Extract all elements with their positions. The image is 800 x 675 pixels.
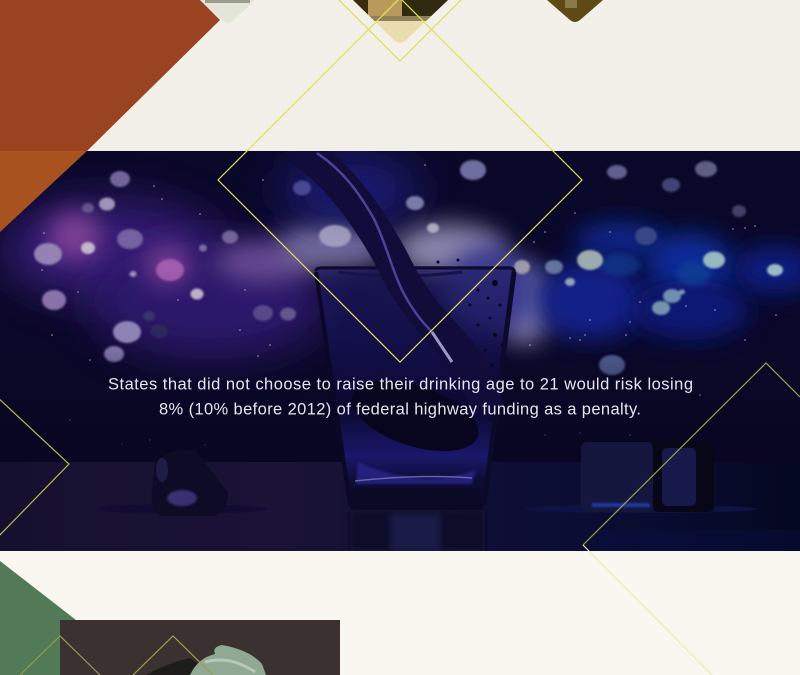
icon: sage leaves [146,645,266,675]
rust triangle [0,0,220,151]
text block: penalty statement: 8% (10% before 2012) of federal highway funding as a penalty. [159,400,641,418]
small top diamond [337,0,463,61]
panel: drinking glass photo [0,151,800,551]
photo thumbnail: gold diamond [353,0,448,42]
large centre diamond [218,0,582,362]
table surface [0,462,800,551]
text block: penalty statement: States that did not choose to raise their drinking age to 21 would risk losing [108,376,693,394]
icon: glass reflection [350,510,485,551]
lower left diamond [20,636,100,675]
photo thumbnail: white diamond [200,0,254,23]
text block: penalty statement [108,376,693,418]
icon: ice cube left [152,458,266,516]
lower middle diamond [133,636,213,675]
icon: glass of water [314,266,516,510]
right diamond on photo [583,363,800,545]
photo thumbnail: olive diamond [547,0,603,22]
panel: dark plant photo [60,620,340,675]
green triangle [0,561,76,675]
bokeh lights [34,160,783,375]
icon: water stream [303,151,488,410]
left diamond [0,395,69,540]
icon: water splash droplets [378,256,504,422]
nebula glow [0,156,800,360]
star specks [41,164,777,446]
icon: ice cubes right [522,442,758,513]
right diamond lower tail [583,545,712,675]
dark shade above table [69,358,701,446]
left rust overlap [0,151,87,232]
